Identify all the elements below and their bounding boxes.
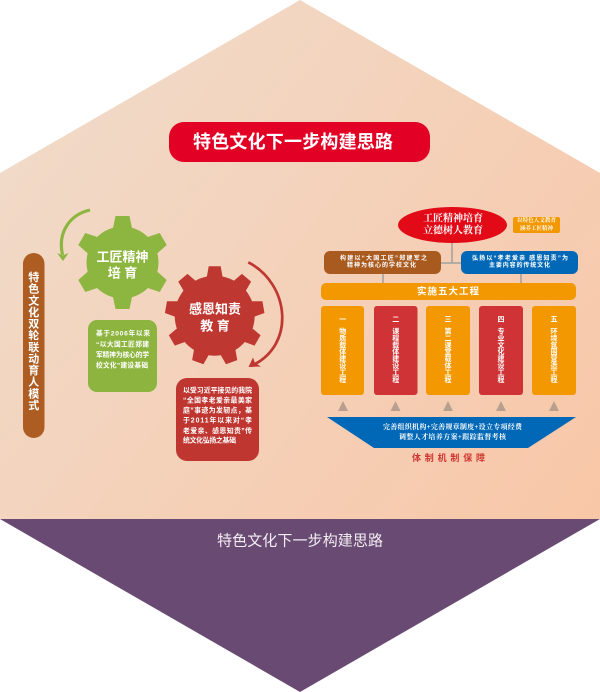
side label: dual-wheel model: 式 [28,398,39,412]
gear label: craftsman spirit [96,250,149,280]
panel: bottom purple triangle [0,519,600,692]
column: project 2: 工 [392,370,399,377]
side label: dual-wheel model: 育 [28,363,39,377]
column: project 3: 工 [444,370,452,377]
connectors [383,243,521,283]
column: project 4: 四 [498,316,504,324]
column: project 2: 程 [392,375,399,384]
column: project 1: 建 [339,354,346,363]
ellipse: core goal: 工匠精神培育 [423,212,483,224]
column: project 5: 境 [550,333,558,342]
column: project 3: 载 [444,354,452,363]
bar: five projects heading [321,283,576,300]
text box: red: 于2011年以来对“孝 [183,416,252,424]
column: project 3 [426,306,470,395]
heading: title pill [169,122,430,162]
label: institutional guarantee: 体制机制保障 [412,452,485,463]
callout: small orange note [513,216,560,233]
text box: green: 基于2006年以来 [96,328,150,338]
column: project 1 [321,306,364,395]
side label: dual-wheel model: 文 [28,293,39,307]
column: project 5: 氛 [550,340,558,349]
column: project 2: 设 [392,361,399,370]
text box: red: “全国孝老爱亲最美家 [183,396,252,404]
side label: dual-wheel model: 动 [28,352,39,365]
column: project 4: 文 [498,340,504,349]
gear label: craftsman spirit: 工匠精神 [96,250,149,264]
callout: small orange note: 以特色人文教育 [517,216,556,224]
side label: dual-wheel model: 联 [28,340,39,354]
column: project 3: 第 [444,326,452,336]
gear label: gratitude education: 教 育 [200,318,230,334]
panel: blue trapezoid support: 调整人才培养方案+跟踪监督考核 [399,432,507,441]
column: project 4: 业 [498,333,504,342]
text box: green: “以大国工匠郑建 [96,340,149,348]
side label: dual-wheel model: 双 [28,318,39,330]
text box: red: 老爱亲、感恩知责”传 [183,426,252,435]
side label: dual-wheel model: 色 [28,282,39,296]
column: project 3: 程 [444,375,452,384]
side label: dual-wheel model: 模 [28,386,39,400]
heading: title pill: 特色文化下一步构建思路 [193,131,393,152]
side label: dual-wheel model: 化 [28,305,39,319]
column: project 2: 建 [392,354,399,363]
box: blue traditional culture [461,251,578,274]
column: project 1: 程 [339,375,346,384]
column: project 5: 围 [550,348,558,356]
column: project 1: 质 [339,333,346,342]
box: blue traditional culture: 主要内容的传统文化 [489,261,550,269]
box: brown school culture: 精神为核心的学校文化 [347,261,416,269]
panel: blue trapezoid support: 完善组织机构+完善规章制度+设立专项经费 [383,422,523,431]
column: project 4: 化 [498,347,504,356]
side label: dual-wheel model: 特 [28,270,39,284]
bar: five projects heading: 实施五大工程 [417,286,479,298]
column: project 2 [374,306,418,395]
column: project 3: 课 [444,340,452,349]
column: project 2: 载 [392,340,399,349]
ellipse: core goal [398,207,507,243]
box: brown school culture: 构建以“大国工匠”郑建军之 [340,254,427,262]
box: blue traditional culture: 弘扬以“孝老爱亲 感恩知责”为 [472,254,568,262]
ellipse: core goal: 立德树人教育 [423,224,483,236]
column: project 5 [532,306,576,395]
panel: hexagon background [0,0,600,519]
column: project 4: 建 [498,354,504,363]
column: project 3: 二 [444,335,452,342]
column: project 2: 课 [392,326,399,336]
column: project 4: 设 [498,361,504,370]
column: project 1: 物 [339,326,346,336]
text box: red: 以受习近平接见的我院 [183,386,252,394]
arrows: five upward triangles [338,401,559,411]
box: brown school culture [324,251,441,274]
column: project 3: 堂 [444,347,452,356]
column: project 3: 三 [444,316,452,324]
column: project 1: 工 [339,370,346,377]
text box: green: 校文化”建设基础 [96,360,148,370]
gear label: gratitude education: 感恩知责 [189,302,241,316]
column: project 5: 工 [550,370,558,377]
icon: red gear [165,266,265,365]
text box: green: 军精神为核心的学 [96,350,149,359]
text box: red: 统文化弘扬之基础 [183,436,236,444]
column: project 4: 工 [498,370,504,377]
column: project 2: 体 [392,347,399,356]
column: project 4: 程 [498,375,504,384]
column: project 5: 造 [550,361,558,370]
column: project 2: 程 [392,333,399,342]
column: project 4: 专 [498,326,504,336]
text box: red [176,378,259,461]
arrow: green curved [57,210,90,261]
icon: green gear [77,216,168,309]
panel: blue trapezoid support [327,417,576,448]
column: project 1: 设 [339,361,346,370]
callout: small orange note: 涵养工匠精神 [520,224,553,232]
column: project 1: 载 [339,340,346,349]
column: project 1: 体 [339,347,346,356]
column: project 2: 二 [392,316,399,324]
text box: red: 庭”事迹为发轫点，基 [183,406,252,414]
column: project 3: 体 [444,361,452,370]
side label: dual-wheel model: 轮 [28,328,39,342]
gear label: craftsman spirit: 培 育 [108,266,137,280]
column: project 5: 程 [550,375,558,384]
column: project 1: 一 [339,316,346,324]
column: project 4 [479,306,523,395]
arrow: red curved [248,262,282,367]
caption: 特色文化下一步构建思路 [217,532,383,550]
column: project 5: 五 [550,316,558,324]
column: project 5: 营 [550,354,558,363]
text box: green [88,320,157,392]
side label: dual-wheel model: 人 [28,376,39,389]
side label: dual-wheel model [23,253,44,438]
column: project 5: 环 [550,328,558,336]
gear label: gratitude education [189,302,241,334]
